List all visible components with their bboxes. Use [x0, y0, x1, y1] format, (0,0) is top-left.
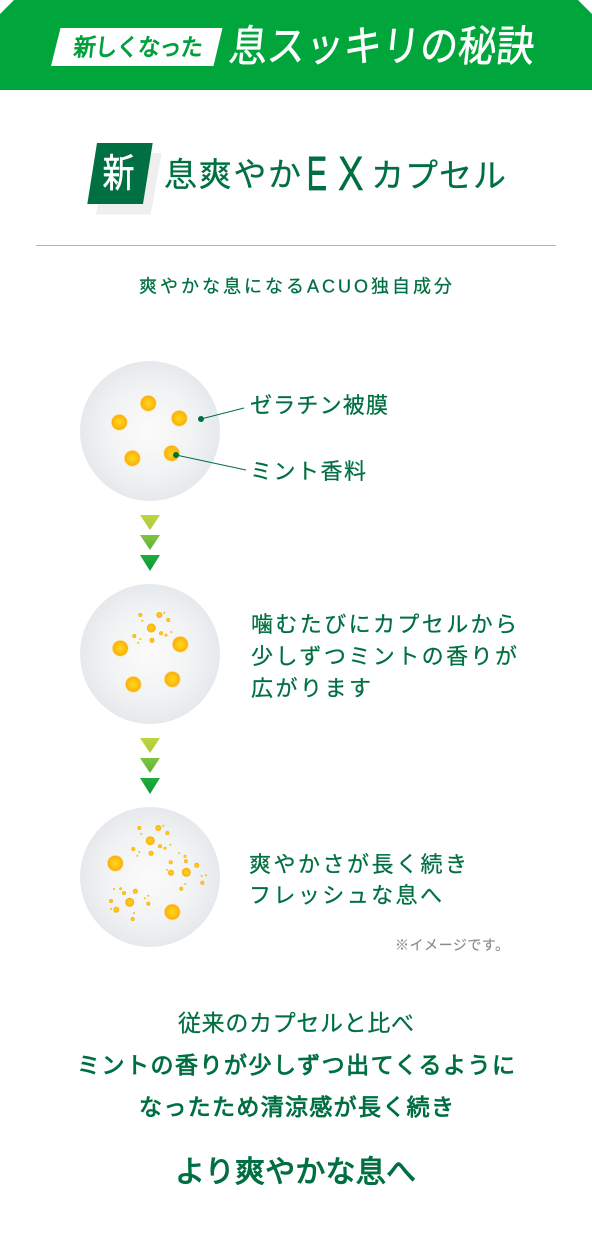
capsule 1 [80, 361, 220, 501]
product title: X [338, 148, 364, 201]
arrows 1 [140, 515, 160, 571]
text: step 2: 噛むたびにカプセルから [251, 612, 517, 637]
subheading: 爽やかな息になるACUO独自成分 [139, 276, 452, 296]
callout: ミント香料: ミント香料 [250, 459, 366, 484]
text: step 2: 広がります [251, 676, 371, 701]
badge: 新しくなった [51, 28, 222, 66]
text: step 2: 少しずつミントの香りが [251, 644, 517, 669]
header banner [0, 0, 592, 90]
text: step 2 [251, 612, 517, 701]
badge: 新しくなった: 新しくなった [72, 34, 204, 61]
summary text [77, 1010, 515, 1189]
summary text: ミントの香りが少しずつ出てくるように [77, 1052, 515, 1078]
arrows 2 [140, 738, 160, 794]
summary text: より爽やかな息へ [175, 1156, 416, 1189]
text: step 3: フレッシュな息へ [249, 883, 442, 908]
title: 息スッキリの秘訣 [227, 22, 537, 70]
note: ※イメージです。 [395, 937, 509, 953]
product title: 息爽やか [164, 156, 301, 193]
product title: カプセル [371, 157, 506, 194]
badge: 新 [87, 143, 162, 214]
callout: ゼラチン被膜: ゼラチン被膜 [250, 393, 388, 418]
product title [164, 147, 506, 201]
summary text: なったため清涼感が長く続き [139, 1094, 454, 1120]
product name [87, 143, 506, 214]
callout: ゼラチン被膜 [198, 393, 388, 422]
capsule 3 [80, 807, 220, 947]
badge: 新: 新 [102, 152, 134, 196]
product title: E [307, 147, 327, 201]
summary text: 従来のカプセルと比べ [178, 1010, 414, 1036]
text: step 3: 爽やかさが長く続き [249, 852, 467, 877]
text: step 3 [249, 852, 467, 908]
capsule 2 [80, 584, 220, 724]
callout: ミント香料 [173, 452, 366, 484]
